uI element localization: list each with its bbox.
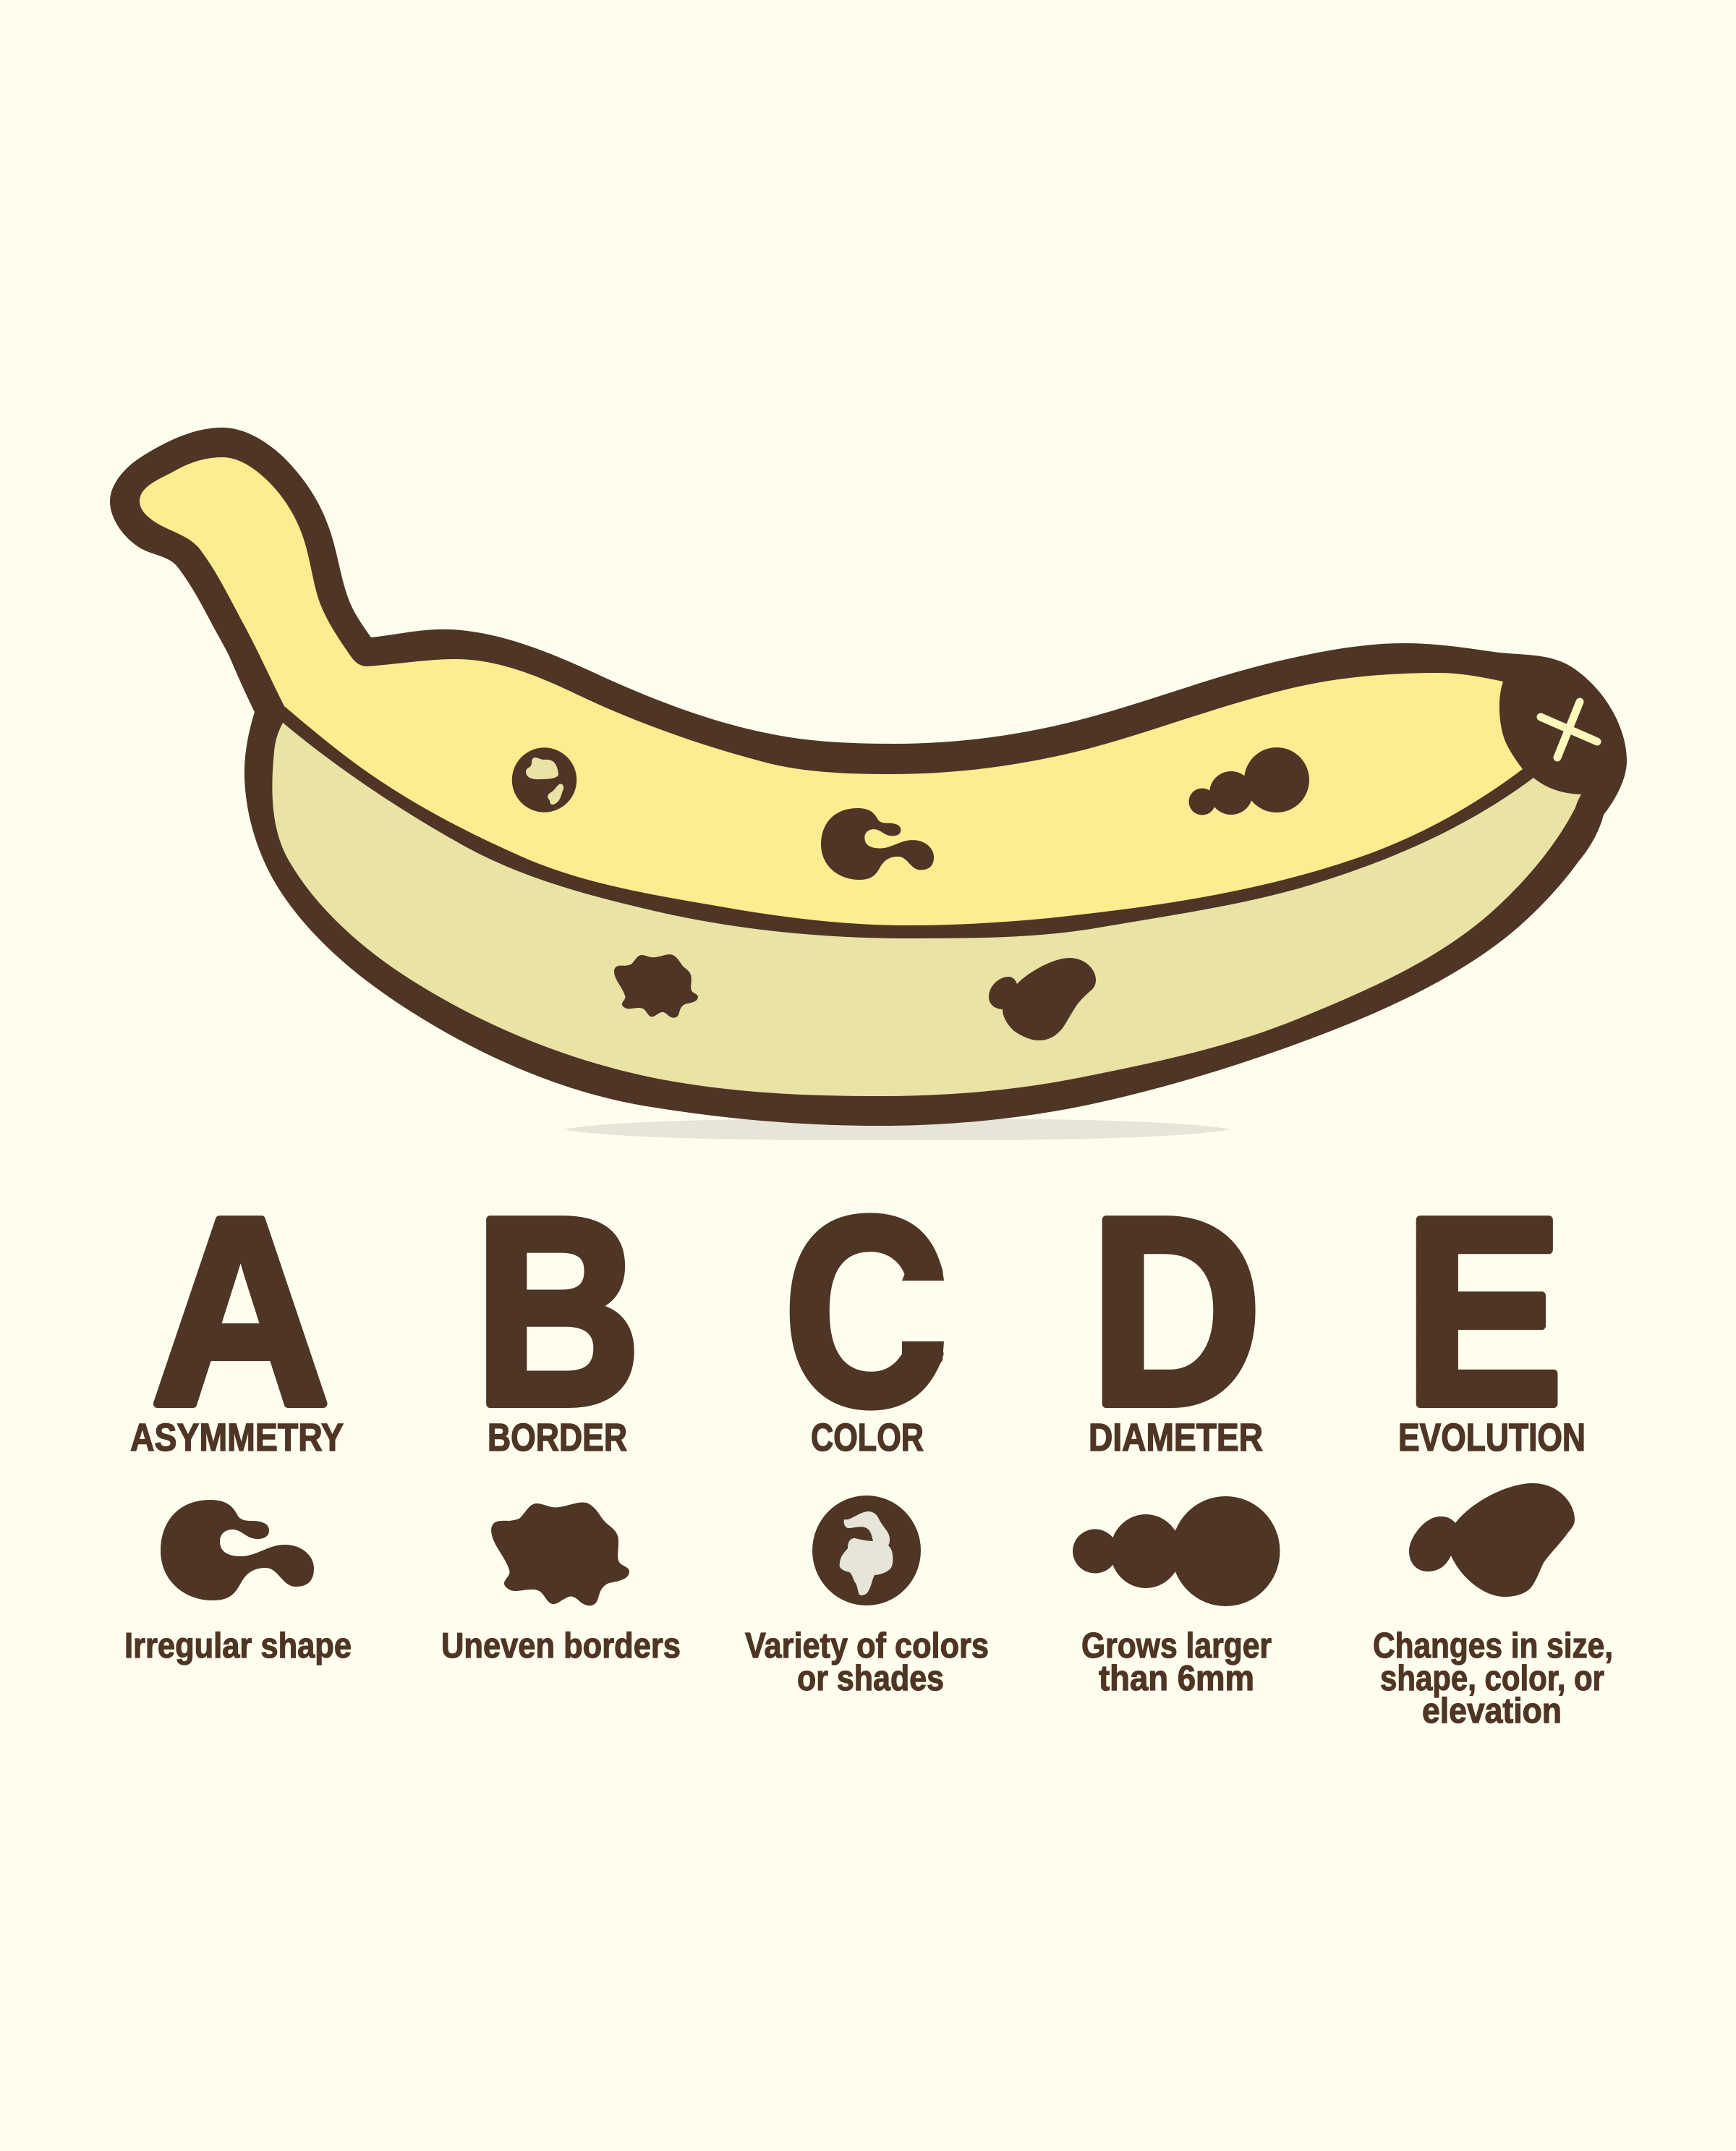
letter D: D xyxy=(1090,1163,1261,1461)
spot: diameter xyxy=(1189,747,1309,815)
description: variety of colors or shades: Variety of colors xyxy=(745,1626,989,1666)
banana upper peel xyxy=(140,457,1523,925)
column: color xyxy=(745,1163,989,1698)
letter A: A xyxy=(151,1163,330,1461)
banana outline and cap xyxy=(110,428,1627,1126)
icon: growing circles xyxy=(1073,1496,1280,1606)
description: changes in size, shape, color, or elevation: shape, color, or xyxy=(1380,1659,1604,1698)
heading: border: BORDER xyxy=(488,1416,627,1459)
spot: border xyxy=(614,954,698,1018)
description: grows larger than 6mm xyxy=(1081,1626,1272,1698)
description: irregular shape: Irregular shape xyxy=(124,1626,352,1666)
column: asymmetry xyxy=(124,1163,352,1666)
column: diameter xyxy=(1073,1163,1280,1698)
column: evolution xyxy=(1373,1163,1613,1731)
description: uneven borders: Uneven borders xyxy=(441,1626,681,1666)
description: variety of colors or shades xyxy=(745,1626,989,1698)
letter B: B xyxy=(475,1163,641,1461)
description: variety of colors or shades: or shades xyxy=(797,1659,944,1698)
heading: diameter: DIAMETER xyxy=(1089,1416,1263,1459)
column: border xyxy=(441,1163,681,1666)
description: changes in size, shape, color, or elevation: elevation xyxy=(1422,1692,1562,1731)
icon: variety of colors xyxy=(812,1495,921,1605)
description: changes in size, shape, color, or elevation: Changes in size, xyxy=(1373,1626,1613,1666)
spot: evolution xyxy=(989,958,1096,1040)
heading: asymmetry: ASYMMETRY xyxy=(130,1416,344,1459)
heading: evolution: EVOLUTION xyxy=(1398,1416,1586,1459)
cap cross mark xyxy=(1541,702,1597,758)
icon: irregular shape xyxy=(161,1500,314,1600)
ground shadow xyxy=(563,1119,1230,1140)
description: changes in size, shape, color, or elevation xyxy=(1373,1626,1613,1731)
description: grows larger than 6mm: than 6mm xyxy=(1099,1659,1254,1698)
banana lower peel xyxy=(272,723,1581,1096)
banana illustration xyxy=(110,428,1627,1126)
icon: uneven border xyxy=(491,1503,629,1605)
letter E: E xyxy=(1404,1163,1563,1461)
heading: color: COLOR xyxy=(811,1416,924,1459)
spot: asymmetry xyxy=(821,808,934,880)
spot: color xyxy=(512,747,576,813)
icon: evolving shape xyxy=(1409,1483,1575,1597)
letter C: C xyxy=(784,1163,946,1461)
description: grows larger than 6mm: Grows larger xyxy=(1081,1626,1272,1666)
